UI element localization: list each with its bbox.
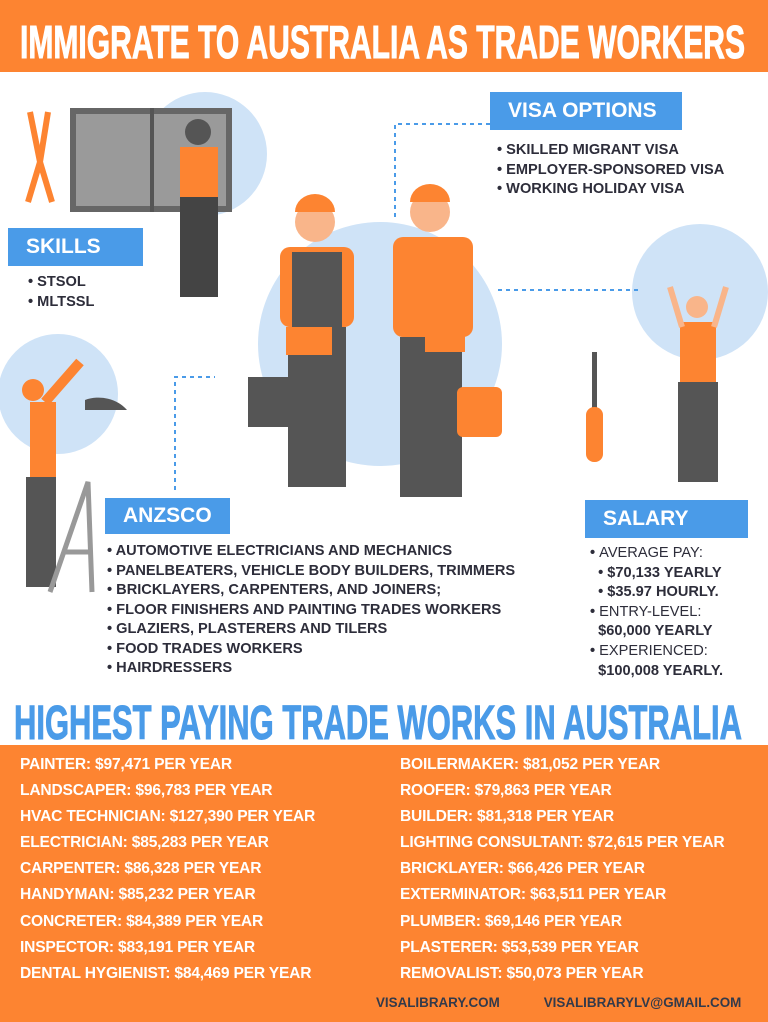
skills list <box>28 274 94 310</box>
left worker ladder <box>22 362 127 592</box>
salary list: • $70,133 YEARLY <box>598 565 722 581</box>
right column <box>400 756 724 982</box>
left column: INSPECTOR: $83,191 PER YEAR <box>20 939 255 956</box>
anzsco list: • AUTOMOTIVE ELECTRICIANS AND MECHANICS <box>107 543 452 559</box>
anzsco list: • PANELBEATERS, VEHICLE BODY BUILDERS, TRIMMERS <box>107 562 515 578</box>
salary list: • $35.97 HOURLY. <box>598 584 719 600</box>
central workers <box>248 184 502 497</box>
anzsco list: • HAIRDRESSERS <box>107 660 232 676</box>
left column: LANDSCAPER: $96,783 PER YEAR <box>20 782 272 799</box>
right column: BUILDER: $81,318 PER YEAR <box>400 808 614 825</box>
salary list: • ENTRY-LEVEL: <box>590 604 701 620</box>
electrical panel <box>70 108 232 212</box>
anzsco label: ANZSCO <box>123 504 212 527</box>
right column: BRICKLAYER: $66,426 PER YEAR <box>400 860 645 877</box>
circles <box>0 92 768 466</box>
salary list: $60,000 YEARLY <box>598 623 713 639</box>
anzsco list <box>107 543 515 676</box>
left column: PAINTER: $97,471 PER YEAR <box>20 756 232 773</box>
right column: REMOVALIST: $50,073 PER YEAR <box>400 965 643 982</box>
visa options label <box>490 92 682 130</box>
salary list: • EXPERIENCED: <box>590 643 708 659</box>
right column: PLASTERER: $53,539 PER YEAR <box>400 939 639 956</box>
pliers <box>28 112 52 202</box>
salary list <box>590 545 723 679</box>
anzsco list: • FOOD TRADES WORKERS <box>107 640 303 656</box>
left column: HVAC TECHNICIAN: $127,390 PER YEAR <box>20 808 315 825</box>
left column: ELECTRICIAN: $85,283 PER YEAR <box>20 834 269 851</box>
visa options label: VISA OPTIONS <box>508 99 657 122</box>
skills label: SKILLS <box>26 235 101 258</box>
left column <box>20 756 315 982</box>
salary list: $100,008 YEARLY. <box>598 663 723 679</box>
right column: LIGHTING CONSULTANT: $72,615 PER YEAR <box>400 834 724 851</box>
left column: CARPENTER: $86,328 PER YEAR <box>20 860 261 877</box>
visa list: • WORKING HOLIDAY VISA <box>497 181 685 197</box>
right worker <box>670 287 726 482</box>
left column: CONCRETER: $84,389 PER YEAR <box>20 913 263 930</box>
footer: VISALIBRARY.COM VISALIBRARYLV@GMAIL.COM <box>376 995 741 1010</box>
left worker at panel <box>180 119 218 297</box>
anzsco label <box>105 498 230 534</box>
screwdriver <box>586 352 603 462</box>
salary list: • AVERAGE PAY: <box>590 545 703 561</box>
right column: ROOFER: $79,863 PER YEAR <box>400 782 612 799</box>
salary label: SALARY <box>603 507 689 530</box>
visa list <box>497 142 724 197</box>
left column: HANDYMAN: $85,232 PER YEAR <box>20 886 255 903</box>
left column: DENTAL HYGIENIST: $84,469 PER YEAR <box>20 965 311 982</box>
salary table panel <box>0 745 768 1022</box>
skills list: • STSOL <box>28 274 86 290</box>
visa list: • SKILLED MIGRANT VISA <box>497 142 679 158</box>
visa list: • EMPLOYER-SPONSORED VISA <box>497 162 724 178</box>
anzsco list: • GLAZIERS, PLASTERERS AND TILERS <box>107 621 387 637</box>
right column: BOILERMAKER: $81,052 PER YEAR <box>400 756 660 773</box>
dashed connectors <box>175 124 640 490</box>
illustration: workers scene <box>0 92 768 593</box>
right column: EXTERMINATOR: $63,511 PER YEAR <box>400 886 666 903</box>
skills list: • MLTSSL <box>28 294 94 310</box>
salary label <box>585 500 748 538</box>
anzsco list: • FLOOR FINISHERS AND PAINTING TRADES WORKERS <box>107 602 501 618</box>
skills label <box>8 228 143 266</box>
anzsco list: • BRICKLAYERS, CARPENTERS, AND JOINERS; <box>107 582 441 598</box>
right column: PLUMBER: $69,146 PER YEAR <box>400 913 622 930</box>
